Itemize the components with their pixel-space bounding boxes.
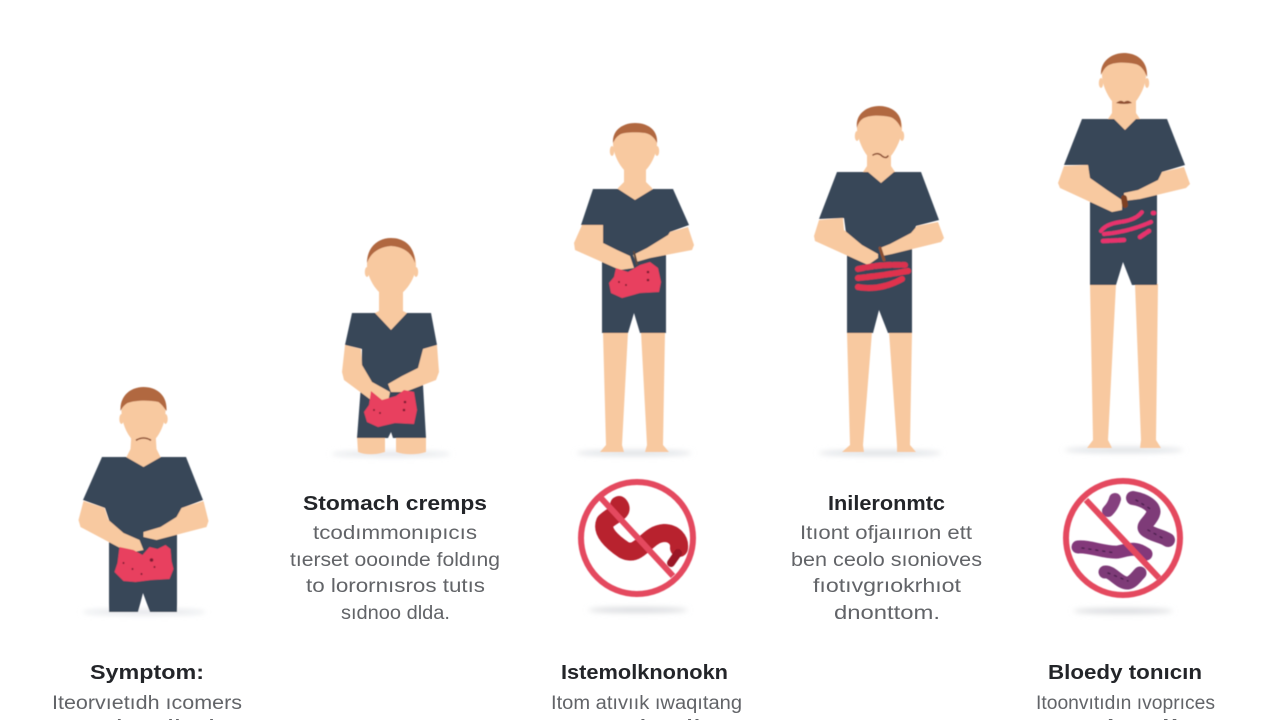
description: ben ceolo sıonioves [791,550,982,571]
description: Itıont ofjaıırıon ett [800,523,973,544]
text block: inflammation [791,493,982,624]
heading: Bloedy tonıcın [1048,662,1202,684]
arms [1058,165,1190,212]
ground shadow [818,450,942,456]
fingers detail [880,248,884,260]
text block: bloody stool [1036,662,1215,720]
description: Itom atıvıık ıwaqıtang [551,693,742,714]
heading: Inileronmtc [828,493,945,515]
text block: middle bottom [551,662,742,720]
stomach [1101,212,1154,241]
description: sıdnoo dlda. [341,603,450,624]
stomach [114,545,174,582]
torso and shorts [819,172,939,333]
legs [600,332,669,452]
neck and head [365,238,418,333]
icon shadow [588,608,688,612]
description [52,693,242,720]
prohibition sign [1066,481,1180,595]
prohibition sign [581,482,693,594]
fingers detail [634,252,637,264]
description: tıerset oooınde foldıng [290,550,500,571]
description: dnonttom. [834,603,940,624]
legs [1087,284,1161,448]
neck and head [119,387,168,471]
arms [574,225,694,270]
text block: stomach cramps [290,493,500,624]
stomach [609,262,661,298]
figure 1: symptoms [78,387,208,614]
arms [814,218,944,265]
figure 4: standing person [814,106,944,456]
legs [357,436,426,454]
stomach [364,390,417,427]
description: Itoonvıtıdın ıvoprıces [1036,693,1215,714]
figure 5: tallest person [1058,53,1190,452]
ground shadow [331,452,451,456]
icon: prohibited bacteria [1066,481,1180,614]
arms [342,345,439,403]
legs [842,332,916,452]
ground shadow [82,610,206,614]
bacteria [1078,498,1168,583]
neck and head [1099,53,1149,132]
stomach [858,265,908,288]
description [791,523,982,624]
torso and shorts [581,189,689,333]
description: tcodımmonıpıcıs [313,523,477,544]
description: fıotıvgrıokrhıot [813,576,962,597]
neck and head [855,106,904,186]
description: Iteorvıetıdh ıcomers [52,693,242,714]
ground shadow [1064,448,1184,452]
heading: Stomach cremps [303,493,487,515]
text block: symptoms [52,662,242,720]
torso and shorts [1064,119,1185,285]
neck and head [610,123,659,202]
description: to lorornısros tutıs [306,576,485,597]
heading: Symptom: [90,662,204,684]
figure 2: stomach cramps [331,238,451,456]
heading: Istemolknonokn [561,662,728,684]
torso and shorts [83,457,203,612]
icon: prohibited intestine [581,482,693,612]
ground shadow [576,450,692,456]
figure 3: standing person [574,123,694,456]
icon shadow [1073,608,1173,614]
fingers detail [1124,198,1125,205]
intestine [604,505,679,563]
arms [78,501,208,553]
description [290,523,500,624]
torso and shorts [345,313,437,438]
